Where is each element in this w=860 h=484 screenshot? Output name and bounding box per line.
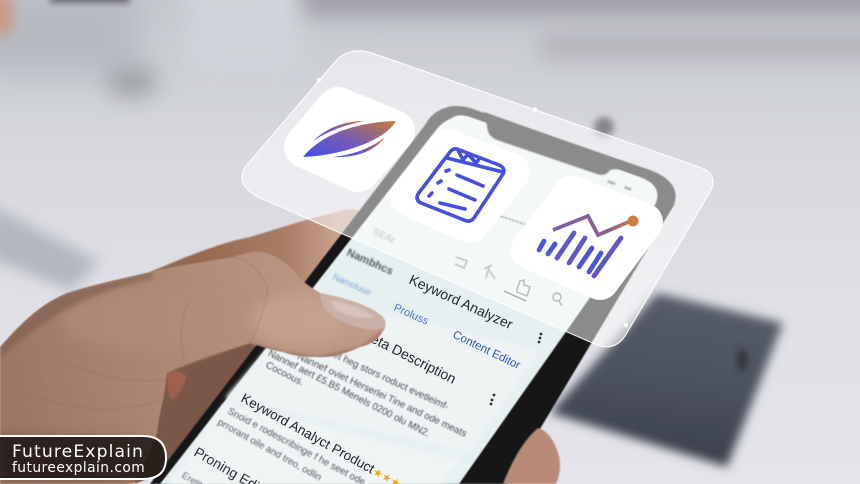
brand badge [0,436,166,479]
icon tile 2: document checklist [409,148,511,224]
title: Keyword Analyzer: Keyword Analyzer [407,271,516,332]
body copy block 2: prrorant oile and treo, odlin [216,417,323,483]
background object: dark phone on table [550,293,783,467]
logo leaves [303,121,396,157]
body copy block: Nannef oviet Herserlei Tine and ode meats [295,351,468,440]
icon tile 3: growth chart [530,195,644,281]
glass panel [242,51,713,347]
skin crease [167,371,186,400]
toolbar tab label 2: Namoluuo [331,272,373,298]
toolbar tab label: Nambhcs [345,247,395,278]
smartphone body [150,106,676,484]
tab: Content Editor: Content Editor [451,329,522,372]
phone notch [484,112,632,175]
brand name: FutureExplain [12,442,144,462]
menu dots [490,333,542,405]
body copy block: Cocoous. [264,360,306,388]
hand: lower right fingertip [503,428,560,484]
thumb shading and highlights [0,257,385,484]
bars [539,233,621,276]
hand: rear fingers behind phone [120,209,372,484]
thumb nail [320,293,386,330]
body copy block: Natmuet heg stors roduct evetleimf- [305,337,450,413]
toolbar icons [455,257,562,306]
icon tile 1: brand logo [303,108,396,171]
blurred screen line [497,215,527,225]
trend line and arrow dot [553,216,633,235]
content cards [170,297,540,484]
screen header text: SEAr [371,227,397,247]
nail highlight [330,300,375,318]
heading: Meta Description: Meta Description [358,325,459,387]
tab: Proluss: Proluss [392,302,431,328]
hand: thumb [0,252,386,484]
heading: Keyword Analyct Product: Keyword Analyct Product [239,391,377,477]
checklist glyph [417,149,504,221]
body copy block: Nannef aert £5.B5 Menels 0200 olu MN2. [266,348,432,440]
smartphone screen [160,112,657,484]
brand url: futureexplain.com [12,460,145,476]
status icons [607,180,632,191]
